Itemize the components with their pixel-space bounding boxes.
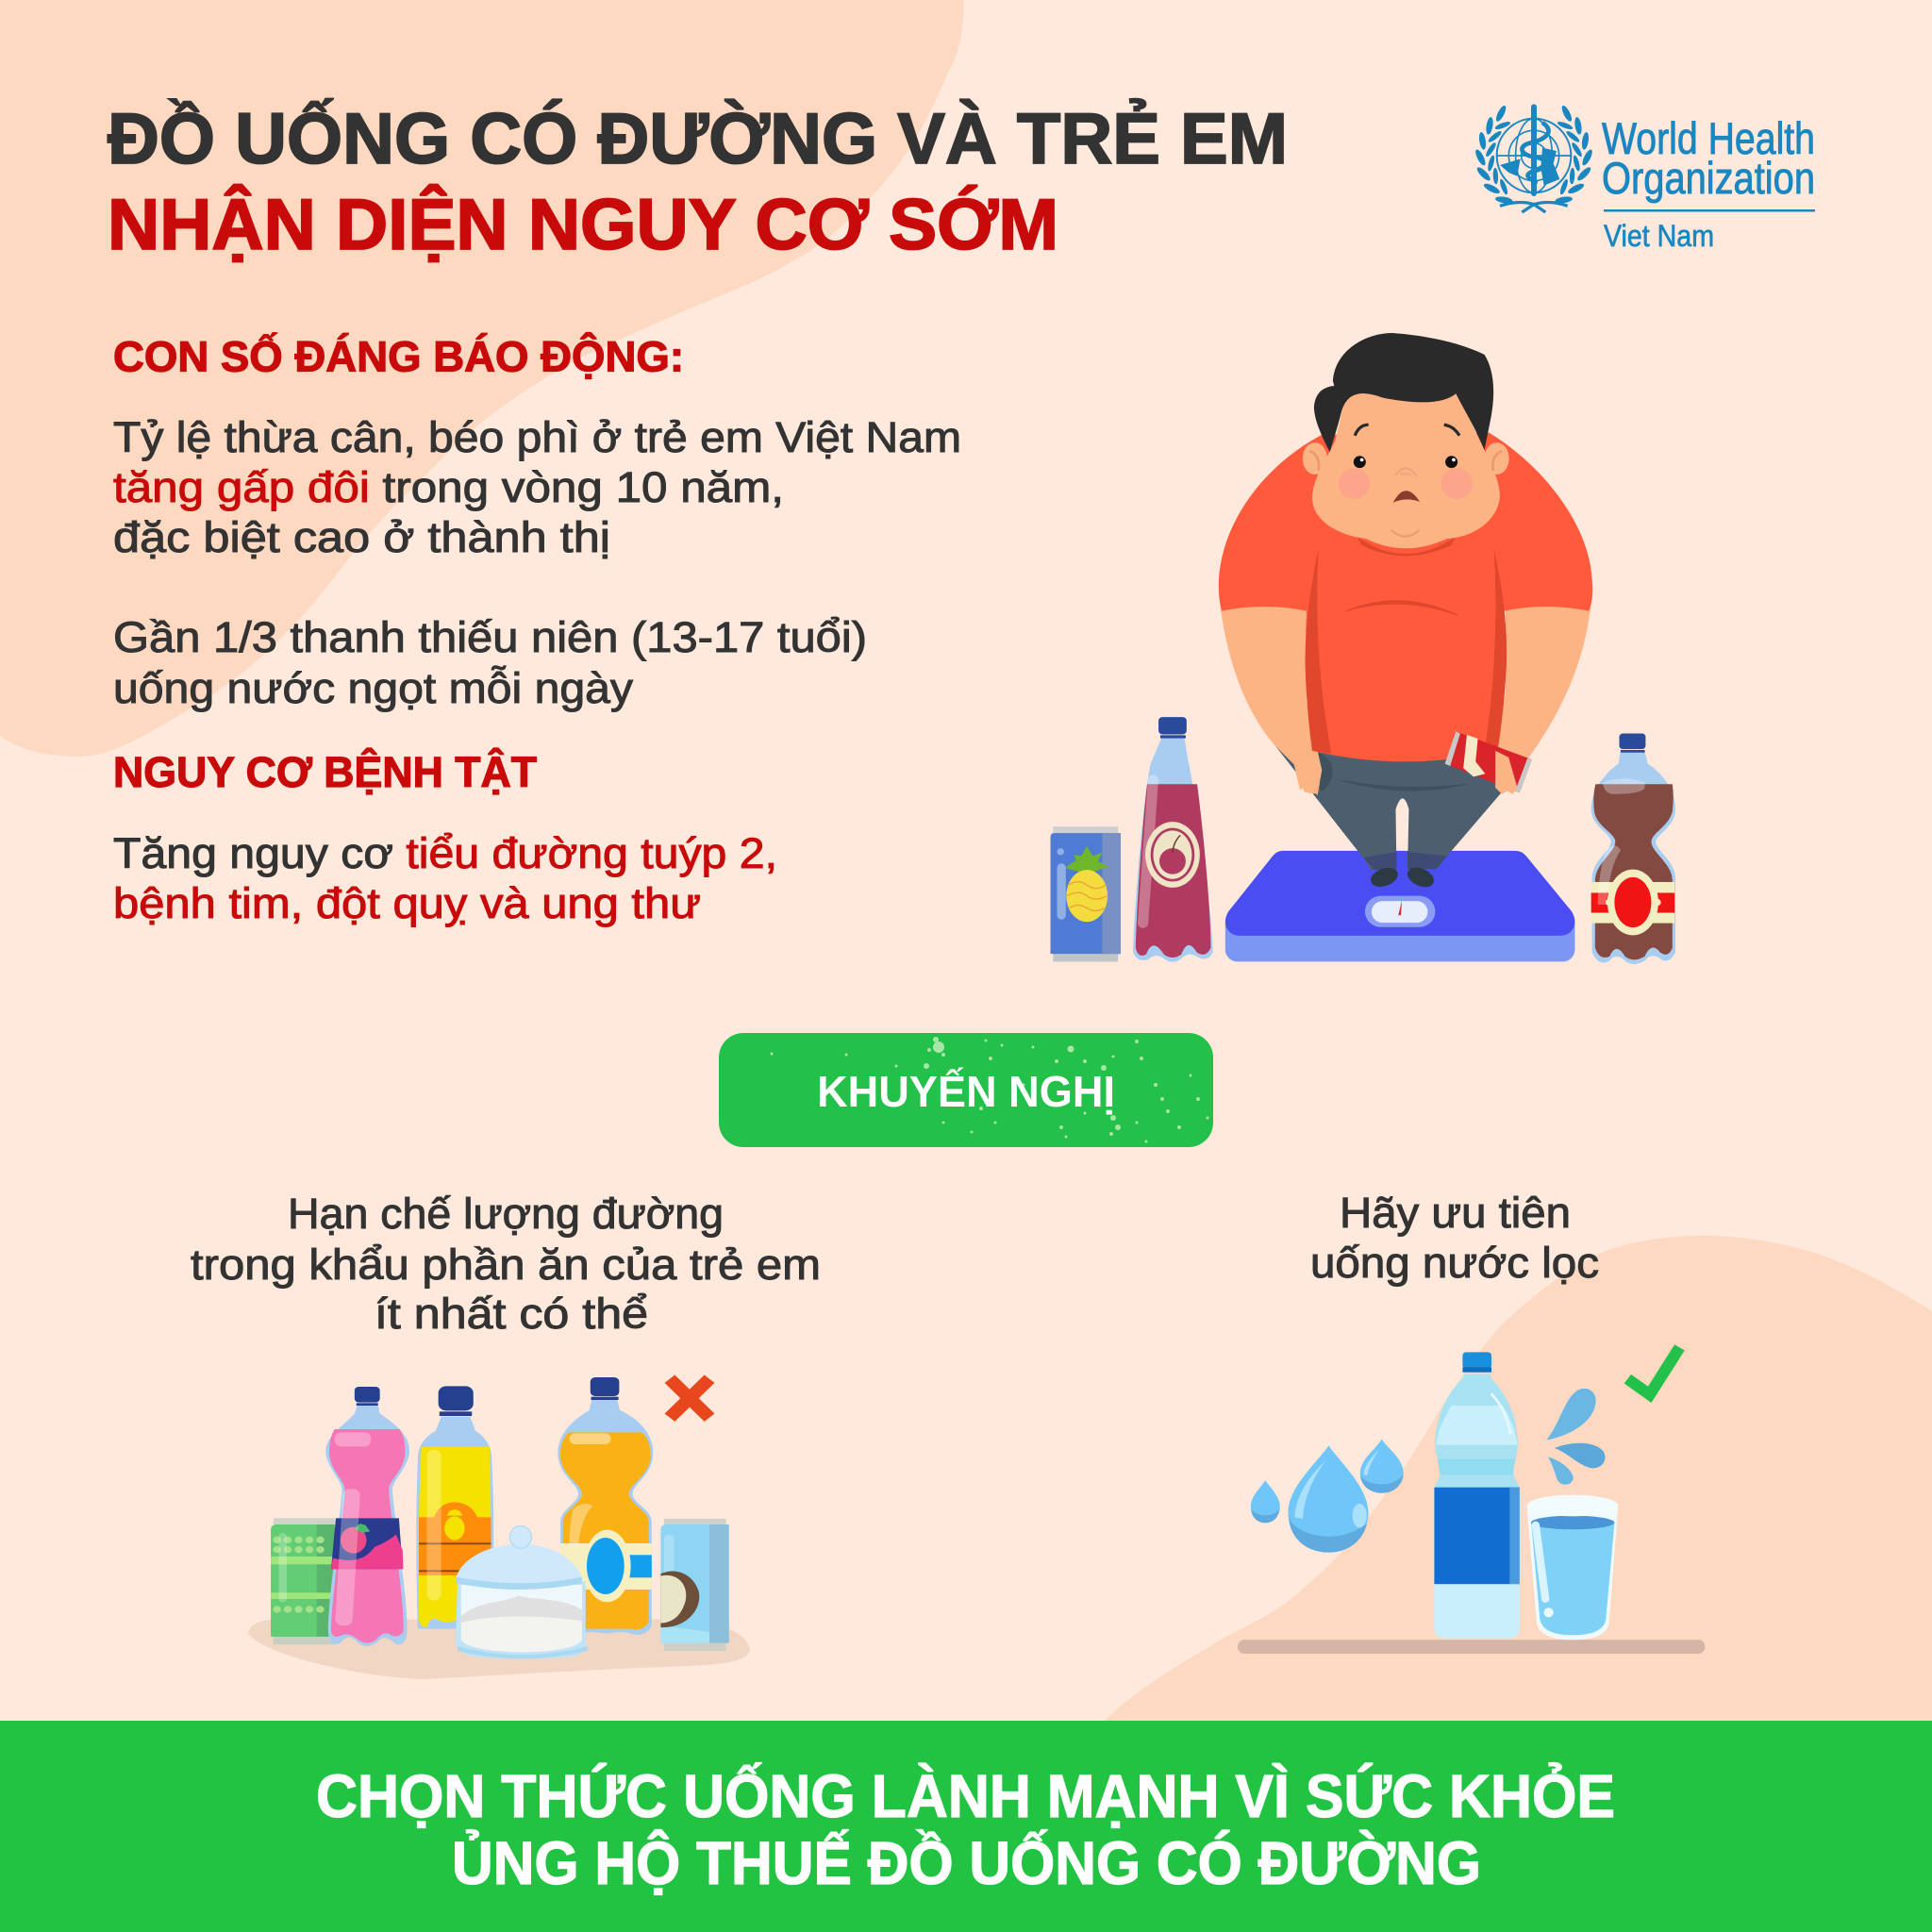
text block: prefer filtered water: uống nước lọc [1310,1239,1599,1287]
icon: green can [271,1518,335,1644]
text block: prefer filtered water [1310,1189,1599,1287]
illustration: sugary drinks to limit [248,1377,750,1679]
text block: teenagers [113,613,867,712]
logo: WHO Viet Nam: World Health [1602,113,1815,163]
text block: prefer filtered water: Hãy ưu tiên [1340,1189,1571,1237]
text block: overweight rate: tăng gấp đôi trong vòng 10 năm, [113,463,784,511]
text block: overweight rate [113,413,961,561]
icon: coconut can [660,1519,729,1651]
icon: small water drop [1251,1480,1280,1523]
icon: large water drop [1288,1445,1369,1553]
icon: red can in hand [1445,731,1532,794]
icon: glass of water [1527,1495,1618,1640]
text block: risks: Tăng nguy cơ tiểu đường tuýp 2, [113,829,777,877]
text block: limit sugar: trong khẩu phần ăn của trẻ em [191,1241,821,1289]
title: NHẬN DIỆN NGUY CƠ SỚM [108,184,1058,265]
button: recommendations: KHUYẾN NGHỊ [817,1067,1115,1116]
text block: limit sugar [191,1190,821,1338]
text block: limit sugar: ít nhất có thể [375,1290,648,1338]
icon: cherry bottle [1133,717,1213,962]
text block: risks: bệnh tim, đột quỵ và ung thư [113,879,701,927]
heading: alarming figures: CON SỐ ĐÁNG BÁO ĐỘNG: [113,332,684,381]
logo: WHO Viet Nam: Organization [1602,153,1815,203]
icon: medium water drop [1360,1440,1404,1493]
icon: cola bottle [1591,734,1675,964]
button: recommendations [719,1033,1213,1147]
illustration: overweight boy with sugary drinks [1051,333,1675,964]
footer band: call to action: CHỌN THỨC UỐNG LÀNH MẠNH VÌ SỨC KHỎE [316,1761,1615,1830]
icon: water splash [1546,1389,1605,1485]
shadow [248,1620,750,1679]
text block: limit sugar: Hạn chế lượng đường [288,1190,724,1238]
text block: risks [113,829,777,927]
icon: orange bottle [558,1377,653,1635]
illustration: filtered water [1238,1347,1705,1654]
icon: pineapple can [1051,826,1121,961]
panel: disease risk [113,748,777,927]
icon: yellow bottle [416,1386,493,1629]
icon: boy [1219,333,1592,891]
text block: teenagers: uống nước ngọt mỗi ngày [113,664,634,712]
icon: sugar bowl [456,1525,588,1658]
logo: WHO Viet Nam [1474,105,1815,253]
panel: alarming figures [113,332,961,712]
icon: check mark [1627,1347,1679,1394]
icon: weighing scale [1225,851,1574,961]
text block: overweight rate: Tỷ lệ thừa cân, béo phì ở trẻ em Việt Nam [113,413,961,461]
title [108,99,1288,265]
shelf [1238,1640,1705,1654]
footer band: call to action [0,1721,1932,1932]
logo: WHO Viet Nam: Viet Nam [1604,219,1714,253]
heading: disease risk: NGUY CƠ BỆNH TẬT [113,748,537,796]
icon: water bottle [1434,1352,1520,1639]
text block: teenagers: Gần 1/3 thanh thiếu niên (13-17 tuổi) [113,613,867,661]
text block: overweight rate: đặc biệt cao ở thành thị [113,513,610,561]
icon: pink bottle [325,1387,409,1646]
footer band: call to action: ỦNG HỘ THUẾ ĐỒ UỐNG CÓ ĐƯỜNG [452,1828,1481,1897]
icon: cross mark [670,1379,709,1418]
icon: WHO emblem [1474,105,1594,212]
title: ĐỒ UỐNG CÓ ĐƯỜNG VÀ TRẺ EM [108,99,1288,179]
